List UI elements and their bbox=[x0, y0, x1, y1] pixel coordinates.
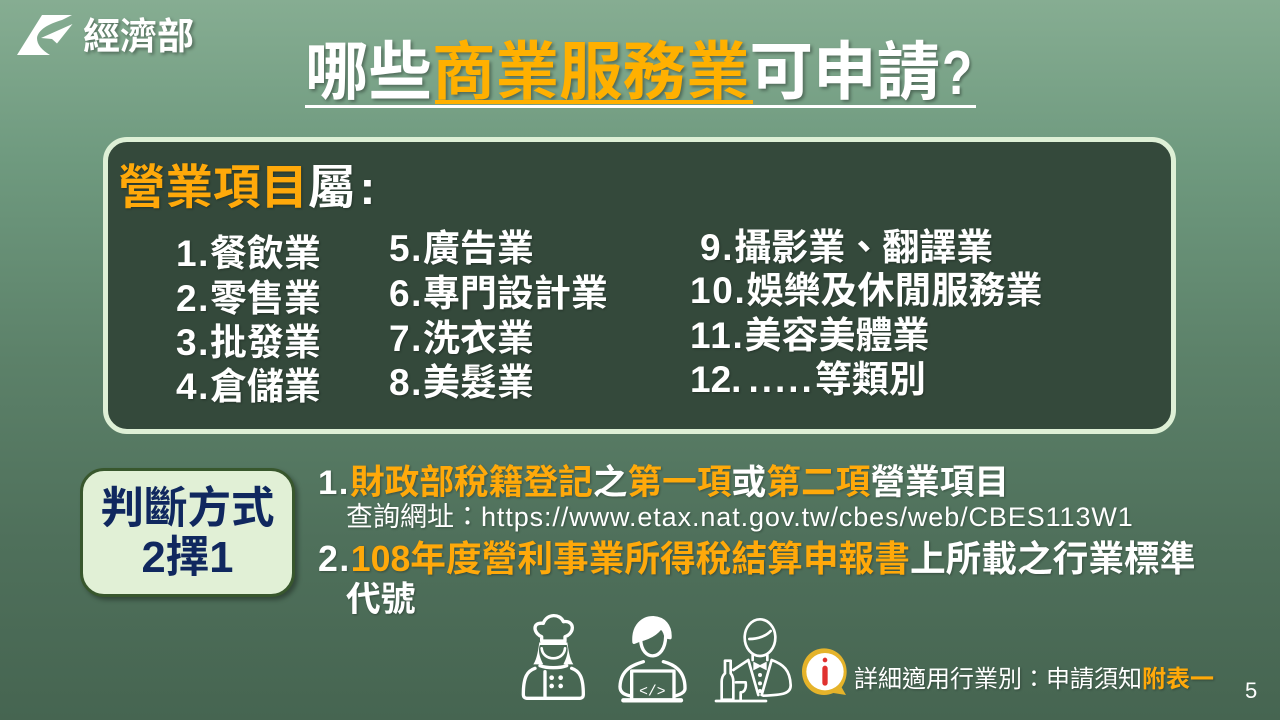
panel: business items bbox=[103, 137, 1176, 434]
list: column 2: 7.洗衣業 bbox=[389, 318, 534, 359]
criteria text bbox=[318, 464, 1196, 619]
icon: programmer bbox=[620, 618, 685, 700]
title text: ? bbox=[942, 39, 972, 108]
list: column 3 bbox=[690, 217, 1043, 400]
list: column 3: 12......等類別 bbox=[690, 359, 926, 400]
list: column 3: 9.攝影業、翻譯業 bbox=[700, 217, 993, 271]
criterion 1: 1.財政部稅籍登記之第一項或第二項營業項目 bbox=[318, 464, 1009, 502]
title text: 哪些商業服務業可申請 bbox=[305, 38, 940, 108]
title bbox=[305, 38, 976, 108]
criterion 2 continuation: 代號 bbox=[346, 581, 415, 619]
panel heading: 營業項目屬: bbox=[118, 162, 375, 215]
lookup URL: 查詢網址：https://www.etax.nat.gov.tw/cbes/web/CBES113W1 bbox=[346, 495, 1134, 534]
list: column 2 bbox=[389, 228, 608, 403]
list: column 1: 2.零售業 bbox=[176, 278, 321, 319]
icon: waiter with wine bbox=[716, 619, 791, 701]
logo text: 經濟部 bbox=[83, 16, 194, 57]
list: column 1: 3.批發業 bbox=[176, 322, 321, 363]
list: column 2: 5.廣告業 bbox=[389, 228, 534, 269]
list: column 2: 8.美髮業 bbox=[389, 362, 534, 403]
icon: info bubble bbox=[802, 648, 847, 695]
list: column 3: 11.美容美體業 bbox=[690, 315, 930, 356]
list: column 2: 6.專門設計業 bbox=[389, 273, 608, 314]
list: column 1: 1.餐飲業 bbox=[176, 233, 321, 274]
list: column 3: 10.娛樂及休閒服務業 bbox=[690, 270, 1043, 311]
footnote: 詳細適用行業別：申請須知附表一 bbox=[854, 659, 1214, 694]
list: column 1 bbox=[176, 233, 321, 407]
icons: occupations bbox=[522, 614, 847, 702]
criterion 2: 2.108年度營利事業所得稅結算申報書上所載之行業標準 bbox=[318, 539, 1195, 579]
list: column 1: 4.倉儲業 bbox=[176, 366, 321, 407]
callout: judgment method: 2擇1 bbox=[142, 534, 233, 582]
logo: Ministry of Economic Affairs bbox=[17, 15, 196, 57]
callout: judgment method bbox=[80, 468, 295, 597]
callout: judgment method: 判斷方式 bbox=[100, 485, 274, 533]
logo mark bbox=[17, 15, 72, 55]
icon: programmer: </> bbox=[639, 684, 666, 700]
icon: chef bbox=[523, 616, 583, 698]
page number: 5 bbox=[1245, 678, 1257, 703]
